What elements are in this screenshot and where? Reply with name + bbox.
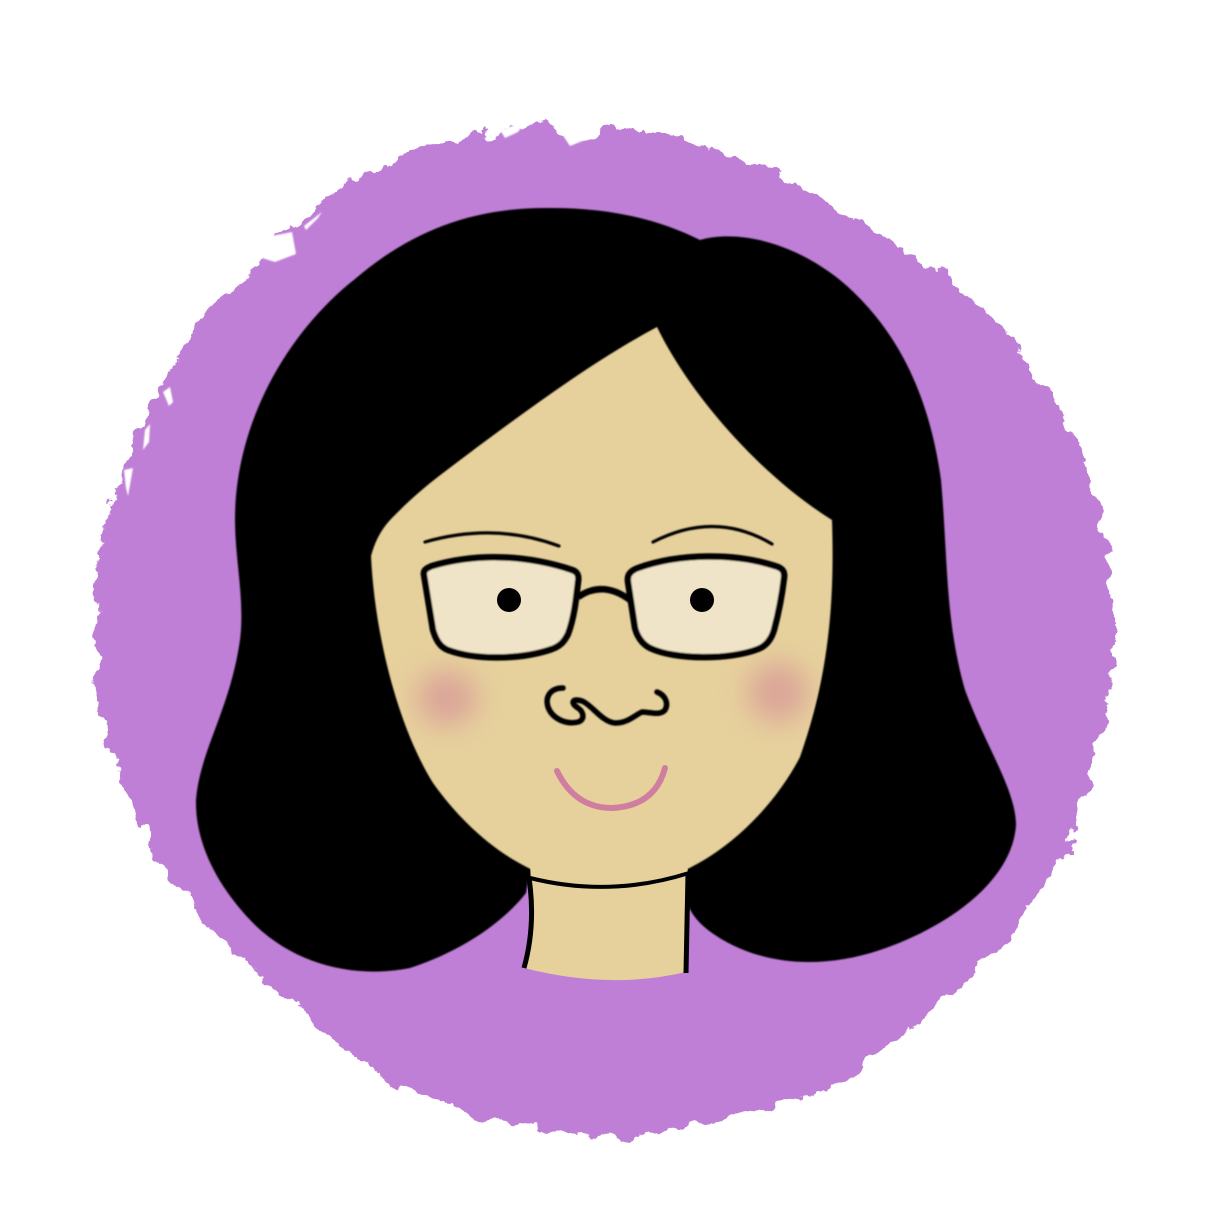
nose [547, 688, 667, 723]
jaw line [530, 873, 689, 887]
hair [196, 208, 1016, 972]
cheek blush: left [417, 670, 477, 726]
avatar illustration [92, 118, 1118, 1143]
cheek blush: right [748, 662, 808, 722]
purple brush background [95, 120, 1113, 1138]
face [371, 327, 833, 888]
glasses [424, 556, 784, 657]
eyes [497, 588, 714, 612]
smile [557, 768, 665, 808]
neck [524, 850, 688, 980]
eyebrows [425, 526, 772, 546]
